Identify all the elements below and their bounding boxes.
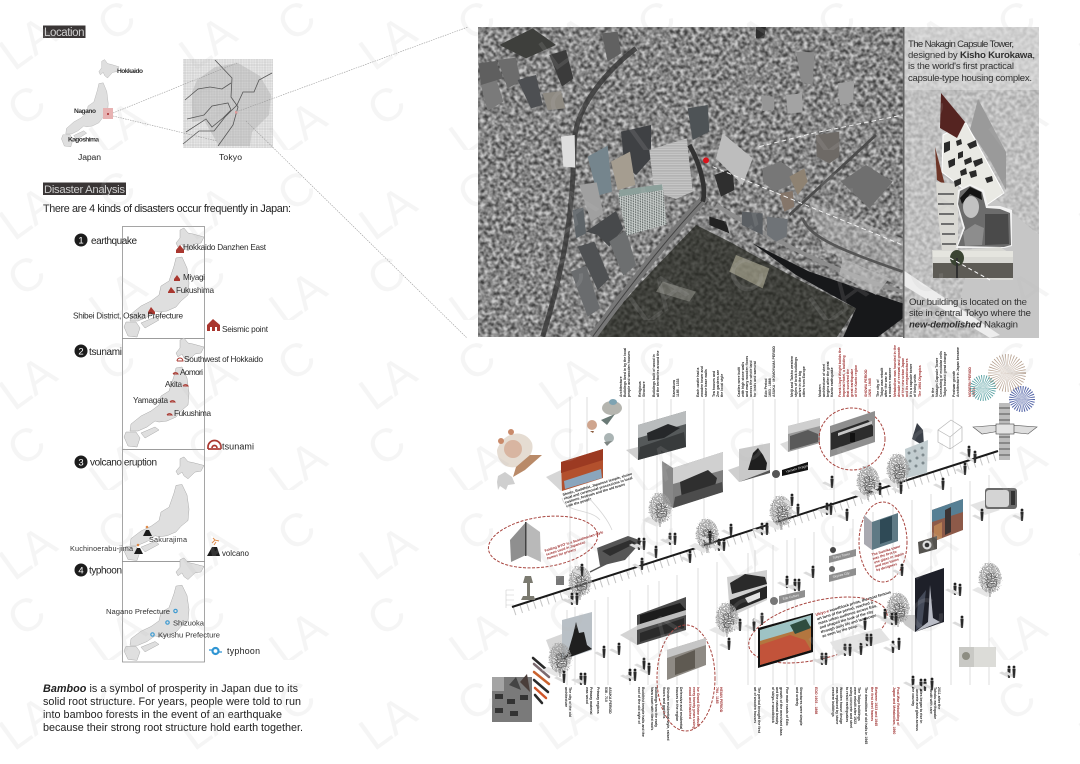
lower period notes: to resist earthquakes (845, 687, 849, 722)
upper period notes: for lords and samurai (753, 361, 757, 397)
upper period notes: Tokyo was rebuilt (880, 367, 884, 397)
panel: earthquake: Fukushima (176, 286, 214, 295)
upper period notes: across the whole land (749, 360, 753, 397)
panel: typhoon: typhoon (89, 566, 122, 576)
panel: typhoon: typhoon (227, 646, 260, 656)
lower period notes: The demolition of old halls in 1945 (864, 687, 868, 744)
upper period notes: of the new urban Japan (901, 358, 905, 397)
photo: festival with caption: ritual and ceremonial processions in local (563, 476, 633, 501)
dashed highlight: folding screens: Folding BYO' is a Scandinavian-style (544, 530, 604, 553)
lower period notes: the country (911, 687, 915, 706)
panel: typhoon: Nagano Prefecture (106, 607, 170, 616)
panel: typhoon: Kyushu Prefecture (158, 630, 220, 640)
lower period notes: every twenty years using (692, 687, 696, 729)
photo: festival with caption (546, 449, 636, 530)
text block: bamboo: into bamboo forests in the event of an earthquake (43, 709, 282, 721)
upper period notes: MODERN PERIOD (968, 367, 972, 397)
dashed highlight: shrine (657, 625, 715, 731)
lower period notes: Between 1923 and 1945 (874, 687, 878, 726)
upper period notes: styles of brick buildings (794, 357, 798, 397)
lower period notes: was replaced by stone (835, 686, 839, 724)
text block: bamboo: Bamboo is a symbol of prosperity in Japan due to its (43, 683, 299, 695)
upper period notes: Kamakura (672, 380, 676, 397)
panel: typhoon (74, 558, 260, 662)
upper period notes: Buildings lived in by the local (623, 348, 627, 397)
photo: night skyscraper (898, 568, 944, 632)
upper period notes: stone base walls (704, 369, 708, 397)
photo: pagoda (546, 612, 592, 660)
text block: bamboo: because their strong root structure hold earth together. (43, 722, 303, 734)
upper period notes: and many wooden floors (745, 356, 749, 397)
typhoon points (151, 609, 177, 636)
heading: Disaster Analysis: Disaster Analysis (44, 184, 125, 196)
map: Japan location: Kagoshima (68, 136, 99, 144)
upper period notes: architecture of steel (822, 364, 826, 397)
number badge 2: 2 (78, 346, 84, 358)
upper period notes: begins after the great (826, 361, 830, 397)
tower caption: capsule-type housing complex. (908, 73, 1032, 84)
tower caption: designed by Kisho Kurokawa, (908, 50, 1035, 61)
lower period notes: Five main roads of Edo (785, 687, 789, 726)
dashed highlight: Hokusai print with text: through daily life and landscape (820, 613, 877, 634)
building masses (479, 27, 893, 317)
panel: tsunami: Fukushima (174, 409, 211, 418)
panel: typhoon: Shizuoka (173, 618, 205, 628)
tower caption (908, 39, 1035, 84)
lower period notes: Buildings from the early (654, 687, 658, 727)
upper period notes: Buildings built of wood in (652, 354, 656, 397)
map: Tokyo grid (183, 59, 273, 162)
upper period notes: 1960s (972, 387, 976, 397)
lower period notes: was wood (585, 686, 589, 704)
lower period notes: 538 - 710 (604, 687, 608, 702)
fireworks (976, 364, 1028, 406)
tower and architect collage (932, 93, 1013, 280)
connector lines from Japan to Tokyo to site (113, 27, 468, 338)
photo: brick building (780, 418, 820, 452)
lower period notes: Primary material (589, 687, 593, 714)
tsunami points (167, 358, 188, 415)
photo: coloured city (932, 499, 963, 542)
lower period notes (564, 686, 941, 744)
lower period notes: Japan and Metabolism, 1960 (892, 687, 896, 734)
photo: festival with caption: with the people (565, 497, 592, 509)
lower period notes: and the natural beauty (775, 687, 779, 724)
upper period notes: Frank Lloyd Wright builds the (838, 348, 842, 397)
lower period notes: architecture (564, 687, 568, 707)
text block: bamboo (43, 683, 303, 734)
capsule facade close-up (492, 674, 532, 722)
panel: earthquake: Seismic point (222, 325, 269, 334)
icon: seismic point (207, 319, 220, 331)
photo: festival with caption: customs, festivals and the old towns (564, 482, 626, 505)
panel: tsunami: Aomori (180, 368, 203, 377)
lower period notes: 2011 after the (937, 687, 941, 709)
dashed highlight: glass building: was the first to (871, 550, 897, 561)
text block: bamboo: solid root structure. For years, people were told to run (43, 696, 301, 708)
upper period notes: Consisting of modular cells (939, 351, 943, 397)
lower period notes: and orderly (795, 687, 799, 706)
upper period notes: Nakagin Capsule Tower (935, 357, 939, 397)
lower period notes: Wooden house design (839, 687, 843, 724)
trees (542, 454, 1001, 677)
tower caption: is the world's first practical (908, 61, 1014, 72)
upper period notes: Architecture (619, 376, 623, 397)
number badge 4 (74, 564, 88, 576)
cross-shaped capsule structure (973, 403, 1037, 460)
timeline of Japanese architecture (485, 345, 1037, 744)
icon: volcano (207, 538, 220, 556)
upper period notes: arrive in the big (798, 371, 802, 397)
lower period notes: Nara court with tiled roofs (650, 687, 654, 730)
panel: volcano eruption: Kuchinoerabu-jima (70, 544, 134, 553)
capsule tower model (905, 423, 928, 478)
map: Tokyo grid: Tokyo (219, 152, 242, 162)
icon: typhoon (209, 648, 222, 654)
lower period notes: Cities began to rise in (919, 687, 923, 723)
lower period notes: rebuilt with care (929, 687, 933, 714)
panel: volcano eruption (70, 450, 250, 562)
dashed highlight: Hokusai print with text: and shaped the look of the city (819, 609, 874, 630)
lower period notes: Buddhist temple halls and the (641, 687, 645, 737)
Japanese house (727, 570, 767, 617)
upper period notes: Tea houses and (712, 371, 716, 397)
upper period notes: 1185 - 1333 (676, 378, 680, 397)
upper period notes: and its megastructures (905, 358, 909, 397)
number badge 3: 3 (78, 458, 84, 468)
lower period notes: Primary regions (596, 687, 600, 714)
lower period notes: The period brought the first (757, 687, 761, 734)
vertical leader lines (567, 397, 989, 685)
site marker and dashed boundary (713, 115, 903, 245)
dashed highlight: glass building (859, 502, 907, 582)
upper period notes: a modern manner (888, 367, 892, 397)
upper period notes: Postwar growth (952, 371, 956, 397)
wireframe cube (938, 420, 962, 449)
lower period notes: western buildings (831, 686, 835, 717)
grey labels: Edo Culture (782, 593, 800, 601)
lower period notes: The Tokyo buildings (857, 687, 861, 721)
number badge 4: 4 (78, 566, 84, 576)
upper period notes: In the (931, 388, 935, 397)
lower period notes: art of wooden houses (753, 687, 757, 723)
upper period notes (619, 345, 976, 398)
panel: tsunami: Southwest of Hokkaido (184, 355, 263, 364)
lower period notes: EDO 1603 - 1868 (814, 687, 818, 714)
upper period notes: of the Kanto region (854, 365, 858, 397)
photo: dark temple (620, 597, 686, 645)
upper period notes: Modern (818, 384, 822, 397)
lower period notes: The city of the old (568, 687, 572, 717)
tower caption: The Nakagin Capsule Tower, (908, 39, 1014, 50)
upper period notes: Kanto earthquake (830, 367, 834, 397)
dashed highlight: folding screens: screen used in Japanese (545, 540, 586, 557)
photo: festival with caption: Shinto, Buddhist, Japanese temple, shrine (562, 472, 633, 497)
camera (918, 536, 937, 554)
white cube with circle (959, 647, 996, 667)
panel: tsunami: tsunami (89, 347, 122, 358)
panel: earthquake (73, 226, 269, 338)
site caption: site in central Tokyo where the (909, 308, 1031, 319)
upper period notes: with high stone walls (741, 362, 745, 398)
upper period notes: Each castle had a (696, 368, 700, 397)
panel: tsunami: tsunami (222, 442, 254, 452)
dashed highlight: glass building: and new forms (875, 557, 899, 568)
number badge 1: 1 (78, 236, 84, 246)
seismic points (148, 245, 184, 314)
intro sentence: There are 4 kinds of disasters occur frequently in Japan: (43, 203, 291, 215)
lower period notes: houses in the region (675, 687, 679, 721)
park (593, 225, 856, 338)
number badge 2 (74, 344, 88, 358)
panel: tsunami: Yamagata (133, 396, 168, 405)
grey labels (770, 547, 856, 605)
tick marks (514, 455, 1000, 611)
upper period notes: 1603 - 1868 (768, 378, 772, 397)
upper period notes: Imperial Hotel, a building (842, 355, 846, 397)
number badge 3 (74, 456, 88, 468)
upper period notes: Castles were built (737, 366, 741, 397)
panel: earthquake: Miyagi (183, 273, 205, 282)
aerial photo of central Tokyo (478, 27, 903, 338)
photo: temple with side panel (662, 452, 723, 508)
upper period notes: all the territories around the (656, 350, 660, 397)
lower period notes: were rebuilt after 1923 (853, 686, 857, 724)
map: Japan location: Nagano (74, 108, 96, 115)
dashed highlight: Hokusai print with text: mass urban audience across Edo, (818, 604, 878, 626)
upper period notes: decade of renewal and growth (897, 347, 901, 397)
television (970, 488, 1017, 515)
black label with badge (772, 462, 810, 478)
lower period notes: of ukiyo-e woodblock (771, 687, 775, 723)
people (554, 446, 1024, 691)
upper period notes: 1926 - 1945 (868, 378, 872, 397)
panel: volcano eruption: volcano eruption (90, 458, 157, 468)
upper period notes: the local style (720, 374, 724, 397)
lower period notes: Ise Grand Shrine rebuilt (696, 687, 700, 728)
lower period notes: Structures were simple (799, 687, 803, 726)
dashed highlight: Hokusai print with text (742, 585, 898, 675)
panel: earthquake: earthquake (91, 236, 137, 247)
lower period notes: Post-War Rebuilding of (896, 687, 900, 726)
water (753, 243, 903, 338)
upper period notes: of living units (913, 374, 917, 397)
panel: tsunami (74, 338, 263, 452)
dashed highlight: Hokusai print with text: Ukiyo-e woodblock prints, the most famous (815, 590, 892, 617)
lower period notes: ASUKA PERIOD (608, 687, 612, 714)
map: Japan location: Japan (78, 152, 101, 162)
lower period notes: the first steel frames (870, 687, 874, 721)
map: Japan location: Hokkaido (117, 68, 143, 75)
upper period notes: It is a capsule tower (909, 363, 913, 397)
photo: castle on river (626, 411, 686, 460)
grey labels: Skytree City (832, 571, 850, 579)
construction area lighter (809, 202, 903, 288)
dashed highlight: glass building: The Sumika tower (871, 544, 902, 557)
volcano points (134, 530, 152, 554)
upper period notes: SHOWA PERIOD (864, 369, 868, 397)
cart and lantern (506, 536, 642, 608)
fish kites (497, 399, 622, 490)
upper period notes: ASUKA · MOMOYAMA PERIOD (772, 346, 776, 397)
upper period notes: that survived the (846, 369, 850, 397)
side panel: Nakagin Capsule Tower (903, 27, 1039, 338)
panel: earthquake: Shibei District, Osaka Prefecture (73, 312, 183, 320)
site caption: new-demolished Nakagin (909, 320, 1018, 330)
upper period notes: Religious (638, 381, 642, 397)
upper period notes: Meiji and Taisho western (790, 356, 794, 397)
lower period notes: Shinden residential style, raised (666, 687, 670, 740)
lower period notes: growth of the merchant class (779, 687, 783, 736)
upper period notes: Metabolism was founded in the (893, 345, 897, 397)
upper period notes: cities from Europe (802, 366, 806, 397)
upper period notes: Architecture in Japan became (956, 347, 960, 397)
icon: tsunami (208, 441, 221, 449)
upper period notes: The 1964 Olympics (918, 365, 922, 397)
koi streamers (533, 658, 549, 703)
upper period notes: Structure (642, 381, 646, 397)
upper period notes: The city of (876, 379, 880, 397)
grey labels: Tokyo Tower (832, 552, 851, 560)
panel: tsunami: Akita (165, 380, 182, 389)
heading: Location: Location (44, 27, 84, 39)
dashed highlight: folding screens (485, 510, 606, 574)
lower period notes: HEIAN PERIOD (719, 687, 723, 713)
upper period notes: Tokyo hosted great change (943, 352, 947, 397)
dashed highlight: folding screens: homes for privacy (547, 547, 577, 561)
photo: castle tower (728, 443, 770, 482)
upper period notes: after the war in (884, 372, 888, 397)
black label with badge: Yamato Dragon (785, 463, 810, 474)
dashed highlight: glass building: by designers (876, 562, 898, 572)
dashed highlight: Hokusai print with text: as seen by the people. (822, 623, 862, 638)
timeline axis (512, 451, 998, 607)
lower period notes: Tohoku earthquake (933, 687, 937, 719)
dashed highlight: Hokusai print with text: art form of the period, reached a (816, 600, 874, 621)
lower period notes: wood and thatched (688, 686, 692, 719)
upper period notes: great earthquake (850, 369, 854, 397)
number badge 1 (74, 234, 88, 246)
upper period notes: Edo Period (764, 379, 768, 397)
lower period notes: Defensive and residential (679, 687, 683, 729)
lower period notes: 794 - 1185 (715, 687, 719, 704)
lower period notes: floors and gardens (662, 687, 666, 719)
roads (543, 48, 903, 337)
map: Japan location (61, 60, 143, 162)
panel: earthquake: Hokkaido Danzhen East (183, 243, 267, 252)
panel: volcano eruption: Sakurajima (149, 535, 188, 544)
panel: volcano eruption: volcano (222, 549, 250, 558)
lower period notes: using concrete and steel (849, 687, 853, 728)
lower period notes: concrete and glass across (915, 687, 919, 731)
dashed highlight: modern building (819, 408, 885, 470)
upper period notes: wooden tower and (700, 366, 704, 398)
site caption: Our building is located on the (909, 297, 1027, 308)
lower period notes: roof of the old style of (637, 687, 641, 725)
upper period notes: people and wooden houses (627, 351, 631, 397)
site caption (909, 297, 1031, 330)
upper period notes: Zen gardens are (716, 370, 720, 397)
dashed highlight: glass building: use glass in Japan (873, 552, 904, 565)
